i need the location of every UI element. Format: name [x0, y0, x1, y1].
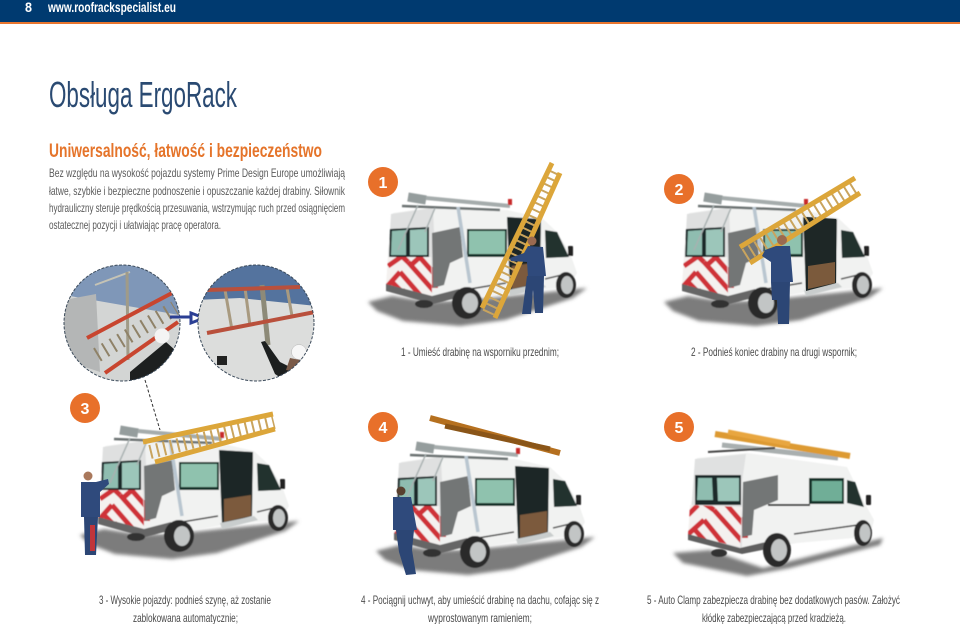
intro text block: Bez względu na wysokość pojazdu systemy Prime Design Europe umożliwiają: [49, 166, 345, 180]
number badge 2: [664, 174, 694, 204]
photo: step 4 van with ladder on roof: [376, 418, 595, 575]
ladder: [715, 432, 850, 456]
photo: step 5 van with secured ladder: [673, 432, 883, 576]
photo: step 1 van with ladder: [368, 163, 587, 326]
photo: step 3 van with raised ladder: [80, 414, 299, 559]
subheading: Uniwersalność, łatwość i bezpieczeństwo: [49, 141, 322, 162]
number badge 3: [70, 393, 100, 423]
caption 2: 2 - Podnieś koniec drabiny na drugi wspornik;: [691, 345, 857, 359]
worker: [393, 486, 417, 575]
caption 3: [99, 593, 271, 624]
ladder: [143, 414, 275, 462]
intro text block: ostatecznej pozycji i ułatwiając pracę operatora.: [49, 218, 221, 232]
number badge 5: 5: [675, 420, 684, 437]
detail circle: left: [64, 264, 180, 382]
number badge 1: 1: [379, 175, 388, 192]
caption 1: 1 - Umieść drabinę na wsporniku przednim;: [401, 345, 559, 359]
caption 5: [647, 593, 900, 624]
header bar: [0, 0, 960, 24]
arrow between detail circles: [170, 313, 204, 323]
number badge 3: 3: [81, 401, 90, 418]
number badge 1: [368, 167, 398, 197]
number badge 2: 2: [675, 182, 684, 199]
worker: [81, 472, 109, 555]
intro text block: łatwe, szybkie i bezpieczne podnoszenie i opuszczanie każdej drabiny. Siłownik: [49, 184, 346, 198]
ladder: [430, 418, 560, 453]
caption 4: [361, 593, 599, 624]
number badge 4: 4: [379, 420, 388, 437]
worker: [510, 236, 546, 314]
intro text block: hydrauliczny steruje prędkością przesuwania, wstrzymując ruch przed osiągnięciem: [49, 201, 345, 215]
title: Obsługa ErgoRack: [49, 74, 238, 115]
dashed connector line: [145, 380, 160, 430]
caption 3: 3 - Wysokie pojazdy: podnieś szynę, aż zostanie: [99, 593, 271, 607]
number badge 5: [664, 412, 694, 442]
caption 4: 4 - Pociągnij uchwyt, aby umieścić drabinę na dachu, cofając się z: [361, 593, 599, 607]
ladder: [740, 178, 860, 263]
worker: [762, 235, 793, 324]
number badge 4: [368, 412, 398, 442]
detail circle: right: [196, 260, 316, 385]
ladder: [482, 163, 560, 318]
intro text block: [49, 166, 346, 232]
photo: step 2 van with ladder: [664, 178, 883, 326]
